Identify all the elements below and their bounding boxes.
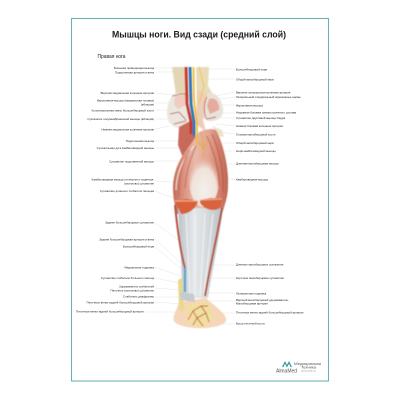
tagline line 2: Техника	[301, 366, 316, 370]
website: almamed.su	[301, 370, 316, 372]
thigh stump left	[172, 67, 185, 96]
calcaneal arteries	[188, 306, 209, 326]
label: Медиальная лодыжка	[124, 265, 154, 269]
plantaris tendon	[176, 146, 194, 190]
label: Икроножная мышца	[236, 103, 263, 107]
calf muscle mass	[173, 129, 228, 214]
left orange muscle end	[175, 199, 198, 214]
heel	[174, 298, 226, 328]
label: Верхний малоберцовый удерживатель,	[236, 298, 289, 302]
labels: right column	[236, 67, 304, 326]
label: Сухожилие полумембранозной мышцы (аблация)	[87, 117, 154, 121]
label: Латеральный и медиальный икроножные нервы	[236, 95, 301, 99]
calcaneus bone	[186, 302, 213, 327]
label: Длинная малоберцовая мышца	[236, 162, 279, 166]
achilles tendon sheet	[178, 208, 223, 298]
label: Большеберцовый нерв	[236, 67, 267, 71]
lateral fibula head	[212, 126, 224, 137]
main nerves and vessels	[186, 67, 191, 134]
condyle pink patches	[174, 94, 189, 109]
label: Заднее большеберцовое сухожилие	[105, 221, 154, 225]
title: Мышцы ноги. Вид сзади (средний слой)	[112, 30, 286, 40]
label: Бугор пяточной кости	[236, 322, 265, 326]
medial malleolus	[178, 278, 184, 310]
logo: AlmaMed medical technology	[276, 361, 321, 374]
label: (аблация)	[141, 102, 154, 106]
label: Подколенная мышца	[126, 139, 154, 143]
label: Пяточное (ахиллово) сухожилие	[111, 288, 154, 292]
icon: teal mountain M	[282, 361, 292, 368]
central pale tissue	[189, 153, 219, 207]
popliteus muscle	[178, 120, 196, 158]
label: Верхняя медиальная коленная артерия	[101, 91, 154, 95]
label: Пяточные ветви задней большеберцовой артерии	[236, 311, 304, 315]
label: Слабитель диафрагмы	[123, 295, 154, 299]
label: Большая приводящая мышца	[114, 66, 154, 70]
label: Удерживатель сгибателей	[119, 284, 154, 288]
label: Головка малоберцовой кости	[236, 132, 276, 136]
label: Большеберцовый нерв	[123, 245, 154, 249]
label: Икроножная мышца (медиальная головка)	[97, 98, 154, 102]
label: Задняя большеберцовая артерия и вена	[99, 237, 154, 241]
label: Латеральная лодыжка	[236, 291, 267, 295]
label: Сухожилие сгибателя большого пальца	[101, 276, 154, 280]
label: Пяточные ветви задней большеберцовой артерии	[87, 300, 154, 304]
right orange muscle end	[200, 198, 222, 210]
label: Наружная боковая связка коленного сустава	[236, 111, 297, 115]
label: Коллатеральная связь большеберцовой кости	[92, 109, 154, 113]
anatomical illustration: leg	[167, 67, 228, 328]
leader lines	[145, 68, 235, 324]
label: (ахиллово) сухожилие	[124, 182, 154, 186]
label: Длинное малоберцовое сухожилие	[236, 263, 284, 267]
right muscle fibres	[207, 134, 223, 192]
label: Подколенная артерия и вена	[115, 71, 154, 75]
label: Сухожилие подошвенной мышцы	[109, 159, 154, 163]
retinaculum band	[180, 292, 195, 302]
label: Пяточные ветви задней большеберцовой артерии	[76, 310, 144, 314]
label: Общий малоберцовый нерв	[236, 77, 274, 81]
left femoral condyle	[167, 93, 191, 128]
tendon streaks	[186, 214, 213, 296]
left muscle fibres	[179, 146, 196, 196]
label: Камбаловидная мышца оттянутая и поднятая,	[92, 178, 154, 182]
thigh stump right	[196, 67, 214, 108]
right red strip	[205, 208, 222, 296]
label: Нижняя медиальная коленная артерия	[101, 127, 154, 131]
label: Сухожильная дуга камбаловидной мышцы	[97, 146, 154, 150]
label: Нижняя боковая коленная артерия	[236, 124, 283, 128]
left red strip	[175, 205, 185, 268]
right femoral condyle	[202, 93, 223, 121]
label: Сухожилие длинного сгибателя пальцев	[100, 189, 154, 193]
label: Общий малоберцовый нерв	[236, 141, 274, 145]
labels: left column	[76, 66, 154, 314]
brand name: AlmaMed	[276, 368, 297, 374]
label: Нерв камбаловидной мышцы	[236, 149, 276, 153]
label: Короткое малоберцовое сухожилие	[236, 276, 284, 280]
subtitle: right leg: Правая нога	[98, 54, 126, 60]
tendon band between condyles	[196, 90, 207, 132]
label: Сухожилие двуглавой мышцы бедра	[236, 116, 286, 120]
nerve branches into calf	[199, 132, 208, 158]
poster frame	[72, 18, 328, 381]
label: Камбаловидная мышца	[236, 177, 268, 181]
label: Малоберцовая артерия	[236, 301, 268, 305]
lower vessels	[184, 268, 186, 292]
tagline line 1: Медицинская	[294, 362, 321, 366]
orange speckle edge	[175, 199, 222, 201]
label: Верхняя латеральная коленная артерия	[236, 90, 291, 94]
condyle arteries	[170, 94, 216, 124]
